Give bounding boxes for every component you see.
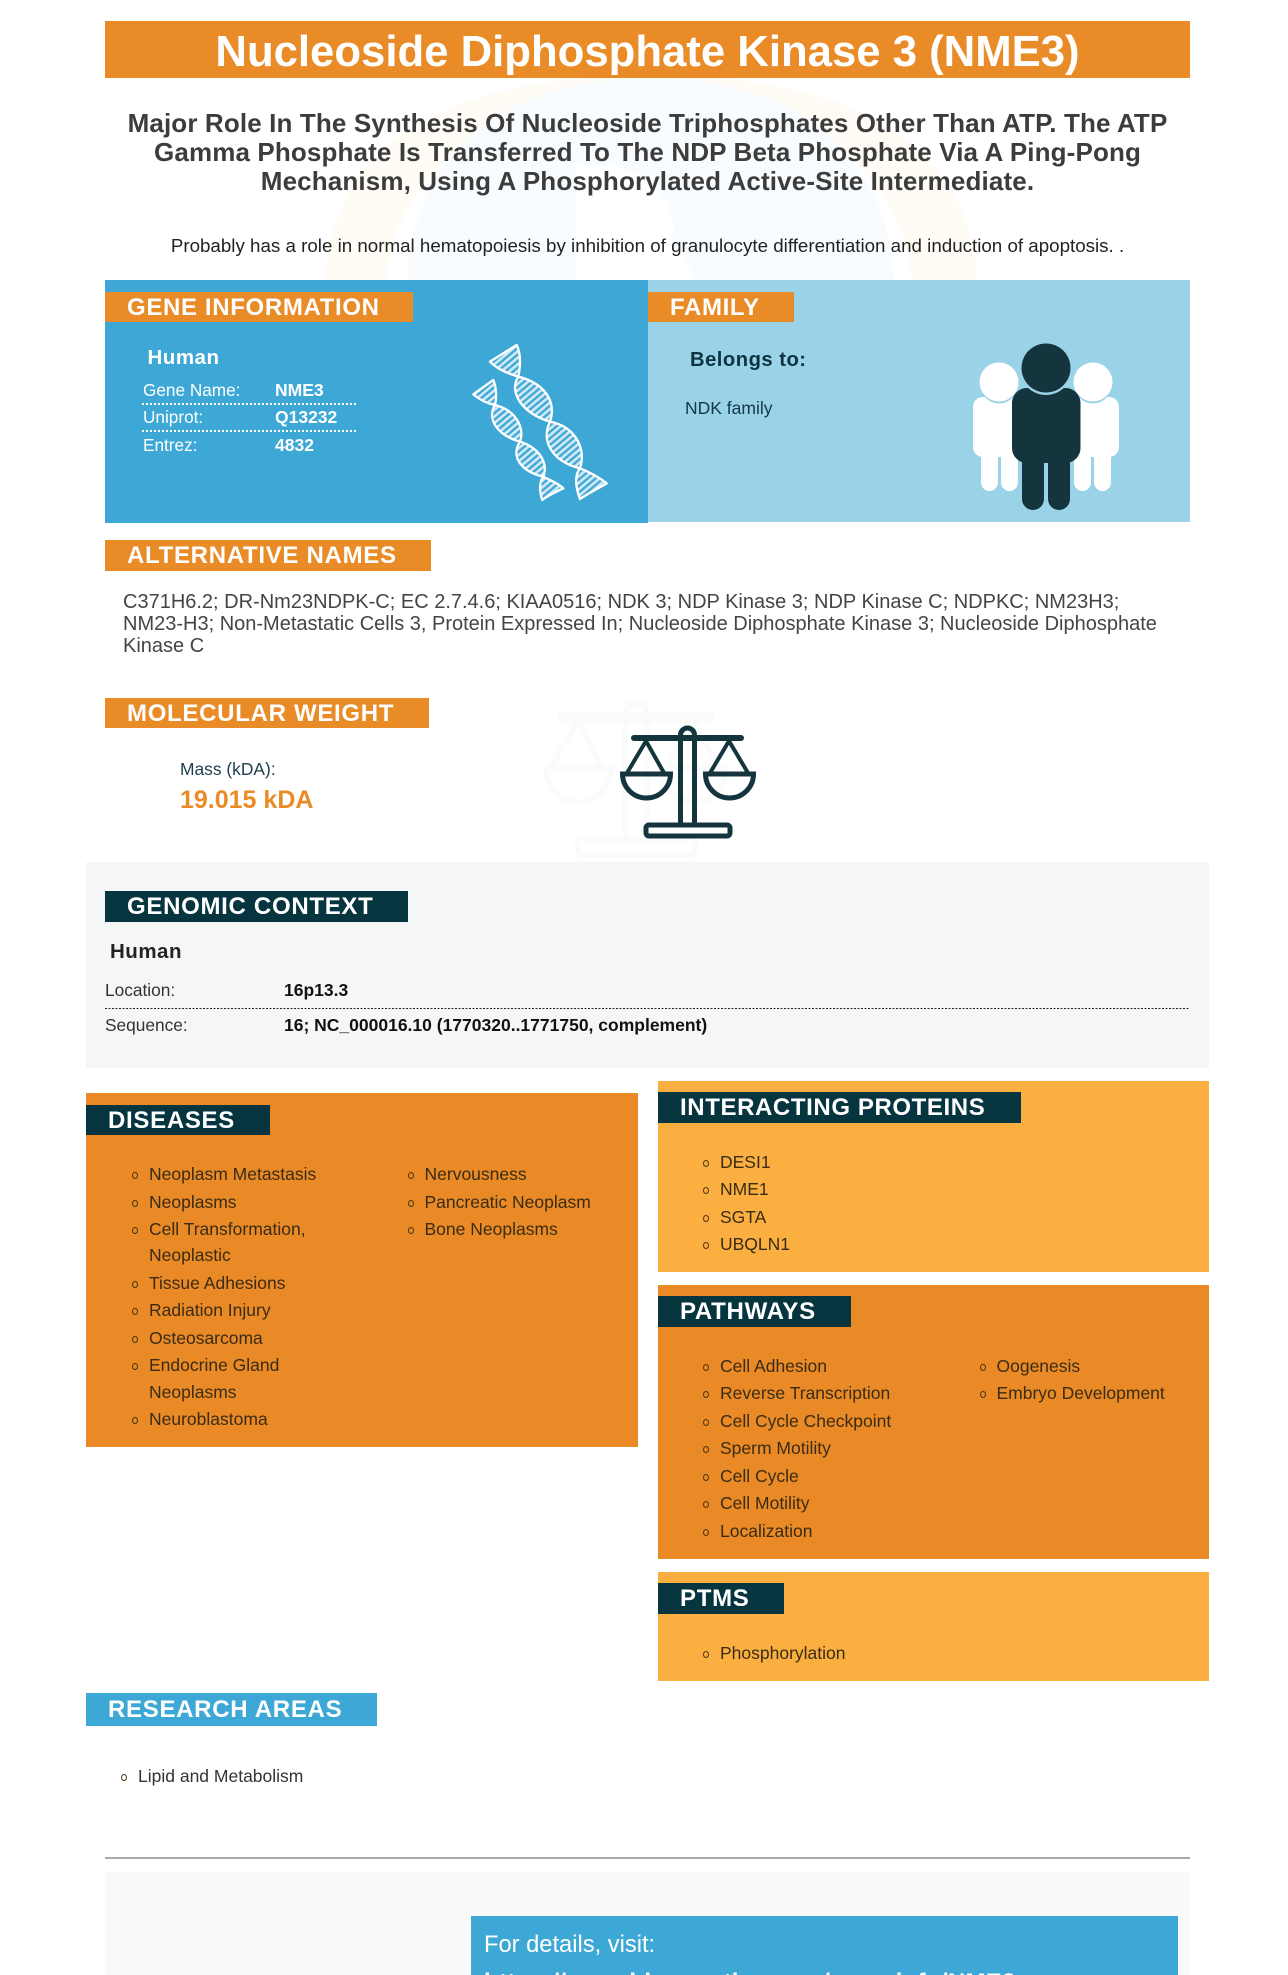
subtitle heading: Gamma Phosphate Is Transferred To The NDP Beta Phosphate Via A Ping-Pong [154,137,1141,167]
family name: NDK family [685,398,773,418]
species label: Human [148,346,219,369]
subtitle heading: Major Role In The Synthesis Of Nucleoside Triphosphates Other Than ATP. The ATP [128,108,1167,138]
gene details table: Entrez: [143,435,197,455]
list: diseases: Pancreatic Neoplasm [424,1192,591,1212]
heading: pathways: PATHWAYS [680,1298,816,1325]
list: interacting proteins [703,1152,790,1254]
title banner [105,21,1190,78]
heading: molecular weight: MOLECULAR WEIGHT [127,700,394,727]
callout: details link [471,1916,1178,1975]
list: diseases: Bone Neoplasms [424,1219,558,1239]
heading: diseases: DISEASES [108,1107,235,1134]
list: interacting proteins: UBQLN1 [720,1234,790,1254]
list: pathways: Cell Cycle [720,1466,799,1486]
panel: PTMs [658,1572,1209,1681]
mass label: Mass (kDA): [180,759,276,779]
list: pathways: Oogenesis [996,1356,1080,1376]
icon: group of people [973,344,1119,510]
list: PTMs: Phosphorylation [720,1643,846,1663]
icon: weighing scale watermark [0,690,1288,862]
list: diseases: Neoplasm Metastasis [149,1164,316,1184]
heading: family: FAMILY [670,294,760,321]
gene details table: 4832 [275,435,314,455]
list: diseases: Osteosarcoma [149,1328,263,1348]
list: diseases: Radiation Injury [149,1300,271,1320]
background watermark [326,78,978,280]
list: pathways: Embryo Development [996,1382,1165,1402]
gene details table: Gene Name: [143,380,240,400]
list: diseases [132,1164,591,1429]
list: pathways [703,1356,1165,1540]
panel: footer [105,1872,1190,1975]
panel: genomic context [86,862,1209,1068]
sequence row: 16; NC_000016.10 (1770320..1771750, complement) [284,1015,707,1035]
heading: PTMs [658,1583,784,1614]
list: diseases: Neoplastic [149,1245,231,1265]
heading: PTMs: PTMS [680,1585,749,1612]
heading: interacting proteins: INTERACTING PROTEINS [680,1094,985,1121]
icon: DNA double helix [472,344,608,502]
gene details table: Q13232 [275,407,337,427]
list: pathways: Sperm Motility [720,1438,831,1458]
heading: diseases [86,1105,270,1135]
heading: research areas [86,1693,377,1726]
alternative names text: Kinase C [123,635,204,657]
list: interacting proteins: DESI1 [720,1152,771,1172]
heading: gene information: GENE INFORMATION [127,294,380,321]
gene details table: NME3 [275,380,324,400]
panel: diseases [86,1093,638,1447]
list: pathways: Localization [720,1520,812,1540]
subtitle heading: Mechanism, Using A Phosphorylated Active-Site Intermediate. [261,166,1034,196]
title banner: Nucleoside Diphosphate Kinase 3 (NME3) [215,27,1080,76]
list: diseases: Neuroblastoma [149,1409,268,1429]
species label: Human [110,940,182,963]
alternative names text: NM23-H3; Non-Metastatic Cells 3, Protein Expressed In; Nucleoside Diphosphate Kinase 3; Nucleoside Diphosphate [123,613,1157,635]
list: diseases: Neoplasms [149,1192,237,1212]
list: research areas: Lipid and Metabolism [138,1766,303,1786]
description text: Probably has a role in normal hematopoiesis by inhibition of granulocyte differentiation and induction of apoptosis. . [171,235,1124,256]
heading: research areas: RESEARCH AREAS [108,1696,342,1723]
panel: pathways [658,1285,1209,1559]
list: diseases: Tissue Adhesions [149,1273,286,1293]
subtitle heading [128,108,1167,196]
location row: Location: [105,980,175,1000]
gene details table [142,380,356,455]
list: pathways: Cell Cycle Checkpoint [720,1410,891,1430]
heading: family [648,292,794,322]
heading: genomic context: GENOMIC CONTEXT [127,893,374,920]
list: interacting proteins: NME1 [720,1179,769,1199]
panel: family [648,280,1190,522]
belongs to label: Belongs to: [690,349,807,371]
icon: weighing scale [620,726,756,838]
location row: 16p13.3 [284,980,348,1000]
list: pathways: Cell Motility [720,1492,809,1512]
list: pathways: Cell Adhesion [720,1356,827,1376]
sequence row: Sequence: [105,1015,188,1035]
list: pathways: Reverse Transcription [720,1382,890,1402]
alternative names text [123,591,1157,657]
alternative names text: C371H6.2; DR-Nm23NDPK-C; EC 2.7.4.6; KIAA0516; NDK 3; NDP Kinase 3; NDP Kinase C; NDPKC; NM23H3; [123,591,1119,613]
list: diseases: Neoplasms [149,1382,237,1402]
location row [105,980,348,1000]
gene details table: Uniprot: [143,407,203,427]
list: diseases: Cell Transformation, [149,1219,306,1239]
heading: alternative names: ALTERNATIVE NAMES [127,542,397,569]
mass value: 19.015 kDA [180,786,313,814]
list: interacting proteins: SGTA [720,1207,766,1227]
list: diseases: Nervousness [424,1164,527,1184]
panel: gene information [105,280,648,523]
list: diseases: Endocrine Gland [149,1355,279,1375]
panel: interacting proteins [658,1081,1209,1272]
divider rule [105,1857,1190,1859]
heading: pathways [658,1296,851,1327]
callout: details link: For details, visit: [484,1932,655,1958]
